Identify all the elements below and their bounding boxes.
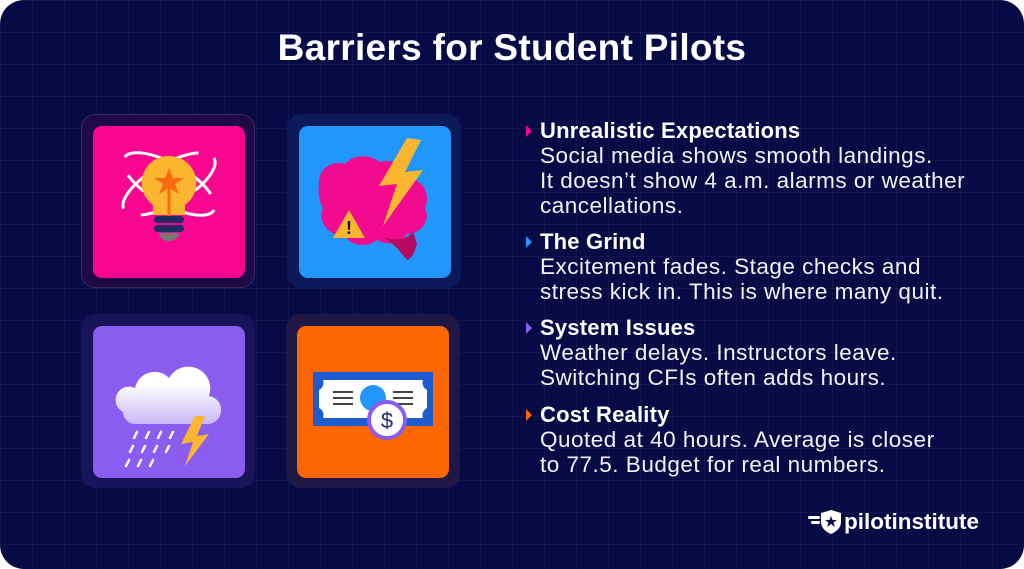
text block: The Grind: stress kick in. This is where many quit. xyxy=(540,279,943,304)
text block: System Issues: System Issues xyxy=(540,315,695,340)
text block: System Issues xyxy=(526,315,897,390)
text block: Unrealistic Expectations: It doesn’t show 4 a.m. alarms or weather xyxy=(540,168,965,193)
text block: Unrealistic Expectations: Social media shows smooth landings. xyxy=(540,143,933,168)
icon: brain xyxy=(299,126,451,278)
text block: Cost Reality: to 77.5. Budget for real numbers. xyxy=(540,452,885,477)
panel: brain tile xyxy=(287,114,461,288)
text block: Unrealistic Expectations: Unrealistic Expectations xyxy=(540,118,800,143)
text block: Unrealistic Expectations: cancellations. xyxy=(540,193,683,218)
text block: Cost Reality: Cost Reality xyxy=(540,402,670,427)
icon: storm cloud xyxy=(93,326,245,478)
text block: Cost Reality: Quoted at 40 hours. Average is closer xyxy=(540,427,935,452)
panel: storm tile xyxy=(81,314,255,488)
panel: lightbulb tile xyxy=(81,114,255,288)
icon: brain: ! xyxy=(346,218,352,238)
text block: System Issues: Weather delays. Instructors leave. xyxy=(540,340,897,365)
text block: The Grind: The Grind xyxy=(540,229,646,254)
panel: money tile xyxy=(286,314,460,488)
text block: The Grind xyxy=(526,229,943,304)
text block: System Issues: Switching CFIs often adds hours. xyxy=(540,365,886,390)
text block: Unrealistic Expectations xyxy=(526,118,965,218)
icon: dollar bill: $ xyxy=(381,408,393,433)
title: Barriers for Student Pilots xyxy=(278,27,746,68)
text block: The Grind: Excitement fades. Stage checks and xyxy=(540,254,921,279)
logo: pilotinstitute xyxy=(844,509,979,534)
icon: lightbulb xyxy=(93,126,245,278)
icon: dollar bill xyxy=(297,326,449,478)
text block: Cost Reality xyxy=(526,402,935,477)
